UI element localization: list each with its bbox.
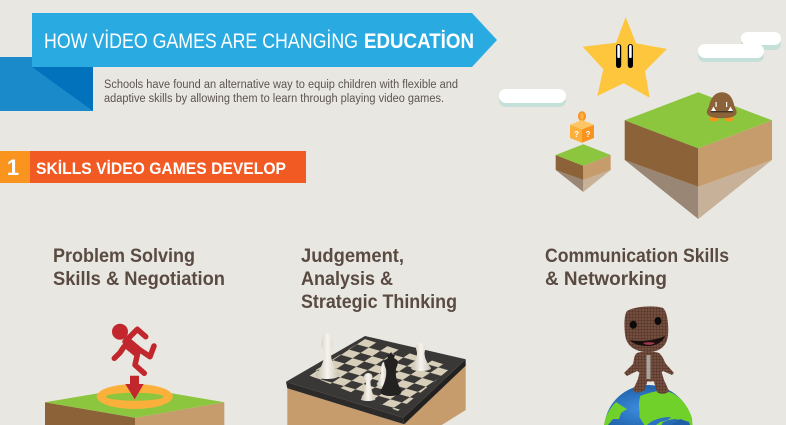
zip [646,355,650,379]
body and arms [624,352,674,382]
intro text: Schools have found an alternative way to equip children with flexible and [104,79,458,91]
floating island: small [556,144,611,192]
heading: problem solving: Problem Solving [53,246,195,267]
section header: skills: 1 [7,155,19,180]
section header: skills: SKİLLS VİDEO GAMES DEVELOP [36,159,286,178]
white piece right [411,343,431,371]
intro text: adaptive skills by allowing them to learn through playing video games. [104,93,444,105]
illustration: globe [604,385,692,425]
floating island: large [625,92,772,219]
icon: question block with coin: ? [586,130,591,139]
icon: star [583,17,667,98]
heading: judgement: Judgement, [301,246,404,267]
black king [381,352,401,396]
head [624,306,668,352]
mouth [630,336,665,346]
cloud: top right back [741,32,781,50]
title: HOW VİDEO GAMES ARE CHANGİNG [44,30,358,53]
heading: communication: Communication Skills [545,246,729,267]
section header: skills [0,151,306,183]
illustration: problem solving platform [45,324,224,425]
cloud: top right front [698,44,764,62]
title banner [0,13,497,111]
white piece behind king [377,362,388,386]
heading: communication: & Networking [545,269,667,290]
icon: question block with coin [570,111,594,143]
eyes [630,321,637,329]
white bishop [316,333,339,379]
legs [633,370,669,394]
heading: problem solving: Skills & Negotiation [53,269,225,290]
heading: judgement: Analysis & [301,269,393,290]
icon: goomba [707,92,737,122]
white pawn [361,373,376,401]
jumping figure [112,324,154,373]
icon: question block with coin: ? [574,130,579,139]
arrow [125,376,144,399]
title: EDUCATİON [364,30,474,53]
illustration: chess board [286,333,466,425]
heading: judgement: Strategic Thinking [301,292,457,313]
illustration: sackboy [624,306,674,394]
cloud: left [499,89,566,107]
ring [97,384,173,409]
